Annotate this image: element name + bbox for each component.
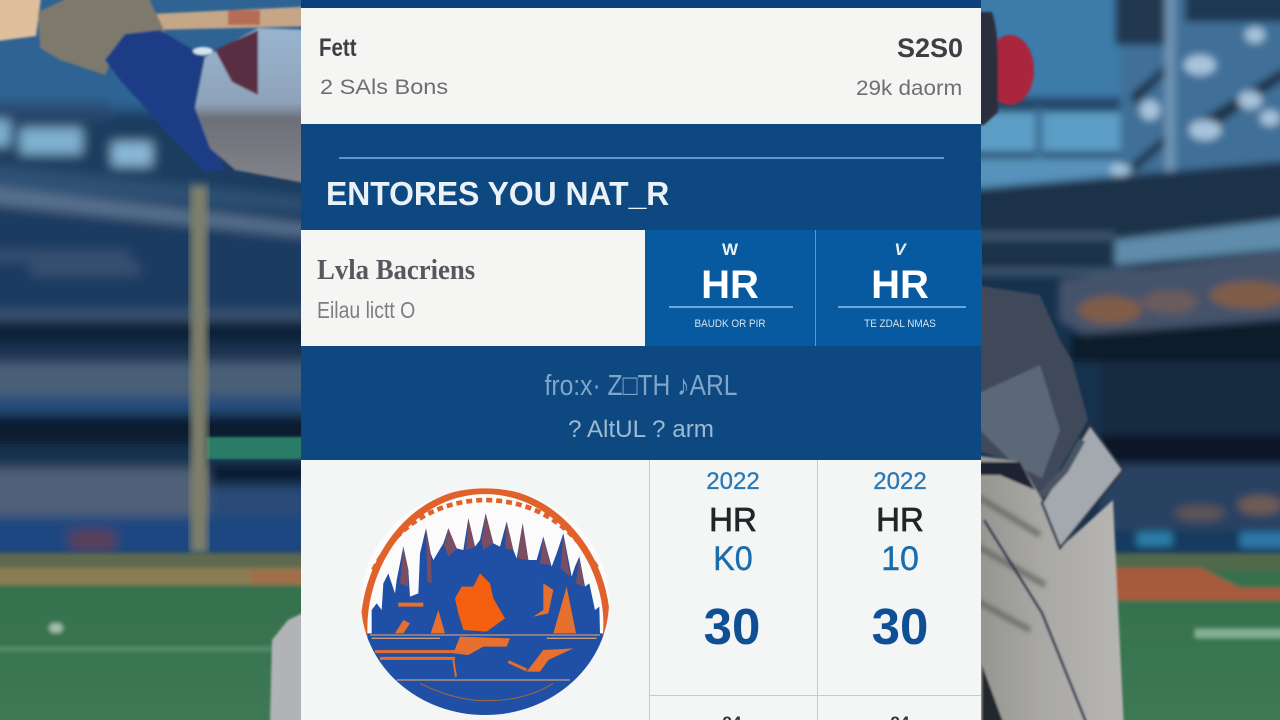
big value: 30 — [704, 598, 760, 655]
year: 2022 — [873, 468, 927, 495]
icon: skyline team logo — [362, 488, 609, 715]
light pole — [190, 185, 208, 553]
value: 10 — [881, 540, 919, 578]
stands left — [0, 0, 320, 560]
panel: mid band — [301, 346, 981, 460]
orange city shapes — [455, 573, 505, 632]
heading: band title: fro:x· Z□TH ♪ARL — [545, 370, 737, 402]
stat rule — [669, 306, 793, 308]
vertical divider — [817, 460, 818, 720]
ballpark field — [0, 553, 1280, 720]
value: K0 — [713, 540, 753, 578]
player figure right — [270, 12, 1124, 720]
logo panel — [362, 488, 609, 715]
text: stat letter: W — [722, 240, 738, 259]
top dark strip — [301, 0, 981, 8]
text: band subtitle: ? AltUL ? arm — [568, 416, 714, 443]
stat column two — [872, 468, 928, 655]
stat value: HR — [871, 263, 929, 307]
cut-off footer numbers — [723, 713, 909, 720]
panel: stats card — [301, 0, 981, 720]
text: stat caption: TE ZDAL NMAS — [864, 318, 936, 330]
heading: batter name: Lvla Bacriens — [317, 255, 475, 286]
year: 2022 — [706, 468, 760, 495]
panel: batter row — [301, 230, 645, 346]
spire tints — [400, 513, 584, 587]
text: left caption: 2 SAls Bons — [320, 76, 448, 99]
text: stat caption: BAUDK OR PIR — [695, 318, 765, 330]
panel: header row — [301, 8, 981, 124]
big value: 30 — [872, 598, 928, 655]
text: stat letter: V — [894, 240, 906, 259]
stat rule — [838, 306, 966, 308]
panel: HR stat one — [645, 230, 815, 346]
stands right — [960, 0, 1280, 560]
panel: HR stat two — [815, 230, 982, 346]
panel: title band — [301, 124, 981, 230]
text: batter caption: Eilau lictt O — [317, 297, 415, 323]
skyline — [366, 514, 604, 715]
heading: left label: Fett — [319, 34, 357, 62]
stat column one — [704, 468, 760, 655]
label: HR — [876, 501, 924, 538]
heading: price: S2S0 — [897, 33, 963, 63]
horizontal divider — [649, 695, 981, 696]
label: HR — [709, 501, 757, 538]
reflections — [453, 637, 573, 672]
vertical divider — [649, 460, 650, 720]
batter arm top-left — [0, 0, 320, 184]
text: right caption: 29k daorm — [856, 77, 962, 100]
green sign — [206, 437, 306, 459]
title: ENTORES YOU NAT_R — [326, 175, 669, 212]
title rule — [339, 157, 944, 159]
stat value: HR — [701, 263, 759, 307]
orange rim — [364, 491, 607, 643]
